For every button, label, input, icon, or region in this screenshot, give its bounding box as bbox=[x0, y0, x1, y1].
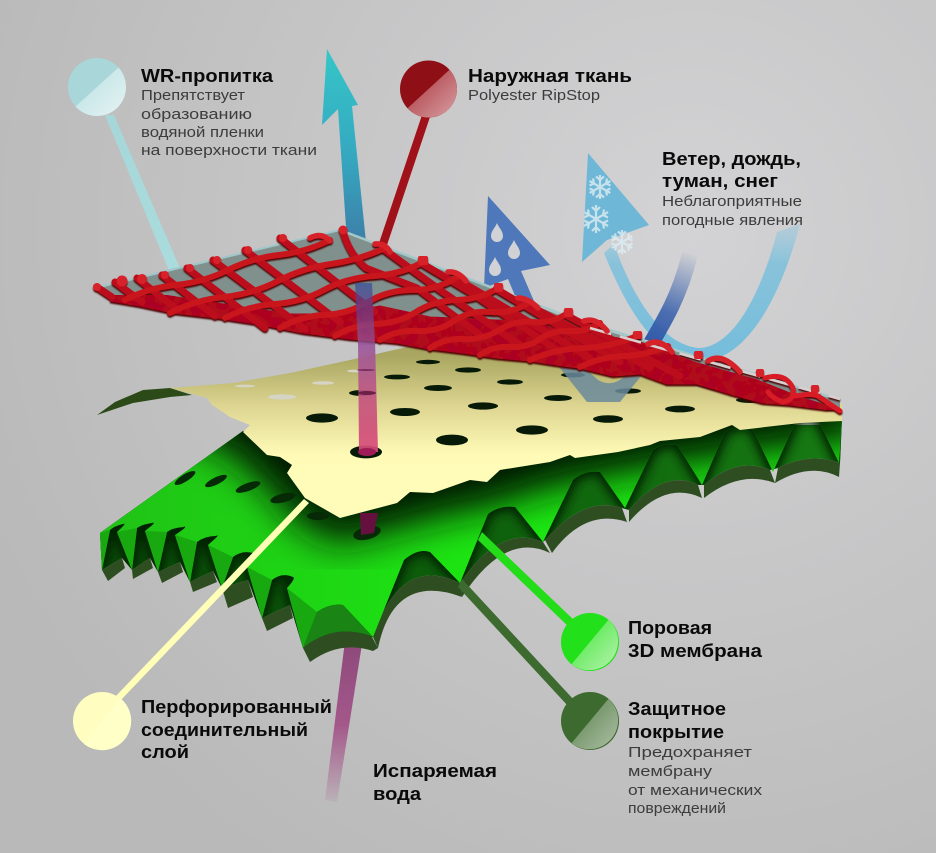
water stream over fabric bbox=[355, 283, 375, 345]
leader line: connecting layer bbox=[115, 499, 309, 701]
label: protective coating bbox=[628, 699, 763, 817]
label: perforated connecting layer: слой bbox=[141, 742, 189, 762]
label: weather: погодные явления bbox=[662, 212, 803, 229]
label: weather: туман, снег bbox=[662, 171, 779, 191]
label: protective coating: мембрану bbox=[628, 763, 713, 780]
see-through holes bbox=[235, 370, 363, 400]
label: outer fabric: Наружная ткань bbox=[468, 66, 632, 86]
perforation holes bbox=[306, 360, 764, 458]
label: WR treatment: образованию bbox=[141, 106, 252, 123]
membrane top surface bbox=[100, 418, 842, 648]
label: WR treatment: на поверхности ткани bbox=[141, 142, 317, 159]
label: WR treatment: водяной пленки bbox=[141, 124, 264, 141]
pale sheet edge on the right bbox=[590, 328, 840, 399]
label: weather: Неблагоприятные bbox=[662, 193, 802, 210]
label: WR treatment: Препятствует bbox=[141, 87, 245, 104]
label: protective coating: повреждений bbox=[628, 800, 726, 817]
evaporated water stream through layer bbox=[357, 340, 378, 456]
leader line: membrane bbox=[478, 532, 576, 628]
arrow: snow U-curve bbox=[582, 153, 800, 361]
label: WR treatment: WR-пропитка bbox=[141, 66, 274, 86]
protective coating bands bbox=[102, 459, 840, 648]
connecting layer underside bbox=[97, 388, 192, 415]
icon: snowflakes bbox=[584, 175, 632, 254]
marker: connecting layer bbox=[73, 692, 131, 750]
label: protective coating: Защитное bbox=[628, 699, 726, 719]
lower evaporated water stream bbox=[325, 625, 365, 802]
wavy cross threads bbox=[125, 240, 668, 367]
arrowhead: snow bbox=[582, 153, 649, 262]
stroke: dark blue wind bbox=[646, 254, 690, 352]
marker: protective coating bbox=[561, 692, 619, 750]
arrow: evaporated water teal bbox=[322, 49, 366, 242]
label: weather: Ветер, дождь, bbox=[662, 149, 801, 169]
label: outer fabric bbox=[468, 66, 632, 104]
water stream stub bbox=[360, 513, 378, 535]
label: protective coating: покрытие bbox=[628, 722, 724, 742]
leader line: outer fabric bbox=[378, 112, 431, 248]
label: WR treatment bbox=[141, 66, 317, 159]
leader line: protective coating bbox=[458, 579, 574, 706]
leader line: WR treatment bbox=[105, 115, 182, 273]
label: perforated connecting layer: соединительный bbox=[141, 720, 308, 740]
label: 3D membrane: Поровая bbox=[628, 618, 712, 638]
perforated connecting layer bbox=[170, 345, 842, 518]
label: weather bbox=[662, 149, 803, 229]
label: perforated connecting layer: Перфорированный bbox=[141, 697, 332, 717]
loose braid at the right end bbox=[765, 376, 840, 411]
water bend under fabric bbox=[560, 362, 642, 402]
marker: outer fabric bbox=[400, 60, 457, 118]
marker: WR treatment bbox=[68, 58, 126, 116]
red ripstop fabric mesh bbox=[93, 226, 840, 411]
label: 3D membrane: 3D мембрана bbox=[628, 641, 763, 661]
label: evaporated water bbox=[373, 761, 497, 804]
label: evaporated water: Испаряемая bbox=[373, 761, 497, 781]
front corner pore bbox=[303, 605, 378, 662]
shadow from connecting layer on membrane bbox=[170, 364, 842, 522]
outer fabric base sheet bbox=[95, 230, 840, 410]
membrane pores on top bbox=[173, 469, 382, 543]
knots along the fabric edge bbox=[93, 226, 819, 393]
label: protective coating: от механических bbox=[628, 782, 763, 799]
thread arcs along the fabric edge bbox=[310, 236, 740, 372]
side walls of pores bbox=[100, 528, 317, 648]
threads from back edge bbox=[97, 232, 680, 376]
pore interiors bbox=[95, 418, 845, 655]
label: evaporated water: вода bbox=[373, 784, 422, 804]
label: protective coating: Предохраняет bbox=[628, 744, 752, 761]
marker: 3D membrane bbox=[561, 613, 619, 671]
label: outer fabric: Polyester RipStop bbox=[468, 87, 600, 104]
arrow: rain with drops bbox=[484, 196, 550, 322]
dense woven band bbox=[110, 295, 838, 410]
3D membrane bbox=[100, 421, 842, 662]
label: 3D membrane bbox=[628, 618, 763, 661]
icon: water drops bbox=[489, 223, 520, 276]
label: perforated connecting layer bbox=[141, 697, 332, 762]
